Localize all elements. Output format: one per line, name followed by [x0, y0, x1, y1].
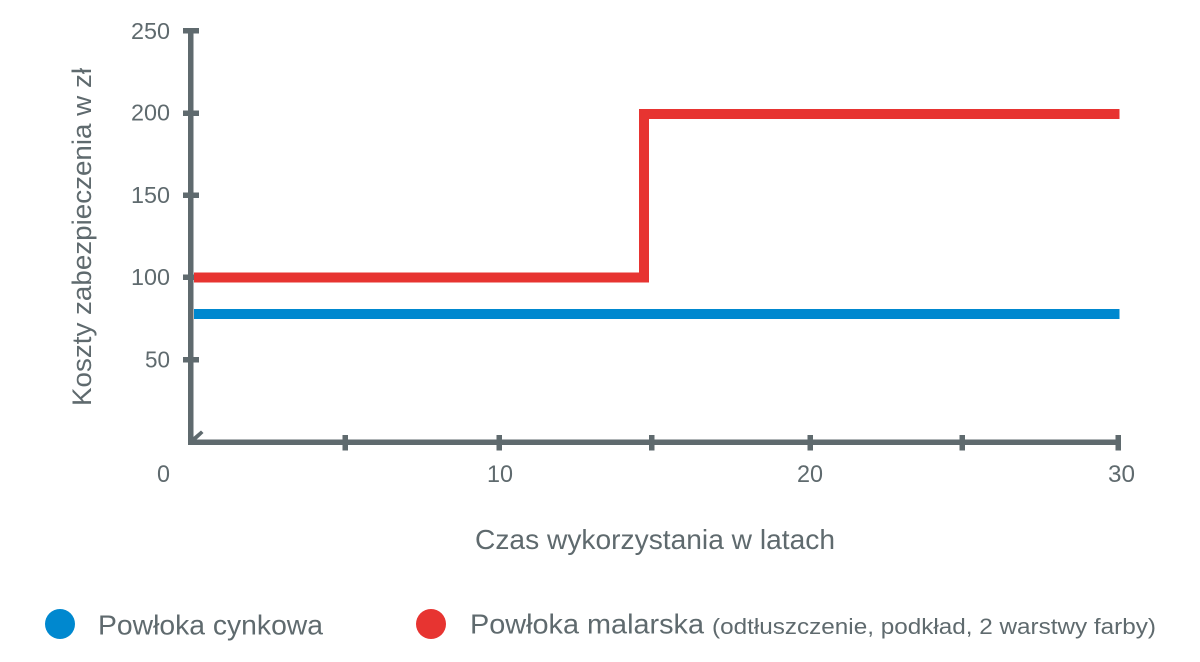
x axis tick labels	[157, 461, 1135, 488]
y axis tick labels: 150	[131, 182, 170, 208]
y axis tick labels: 100	[131, 264, 170, 290]
legend marker: blue	[45, 609, 75, 639]
legend: paint coating	[416, 608, 1156, 640]
y axis tick labels: 200	[131, 100, 170, 126]
legend note: paint coating details: (odtłuszczenie, podkład, 2 warstwy farby)	[712, 614, 1156, 639]
legend: zinc coating	[45, 609, 324, 640]
x axis tick labels: 10	[487, 461, 513, 488]
y axis tick labels: 50	[145, 346, 170, 372]
x axis tick labels: 20	[797, 461, 823, 488]
y axis title: Koszty zabezpieczenia w zł	[67, 68, 97, 406]
line: zinc coating	[194, 309, 1120, 319]
legend label: zinc coating: Powłoka cynkowa	[98, 610, 324, 640]
y axis with ticks	[183, 28, 199, 445]
legend marker: red	[416, 609, 446, 639]
x axis tick labels: 0	[157, 461, 170, 488]
x axis with ticks	[188, 430, 1121, 450]
x axis tick labels: 30	[1108, 461, 1135, 488]
y axis tick labels	[131, 18, 170, 372]
x axis title: Czas wykorzystania w latach	[475, 524, 835, 555]
legend label: paint coating: Powłoka malarska	[470, 608, 705, 640]
line: paint coating	[194, 114, 1120, 278]
y axis tick labels: 250	[131, 18, 170, 44]
